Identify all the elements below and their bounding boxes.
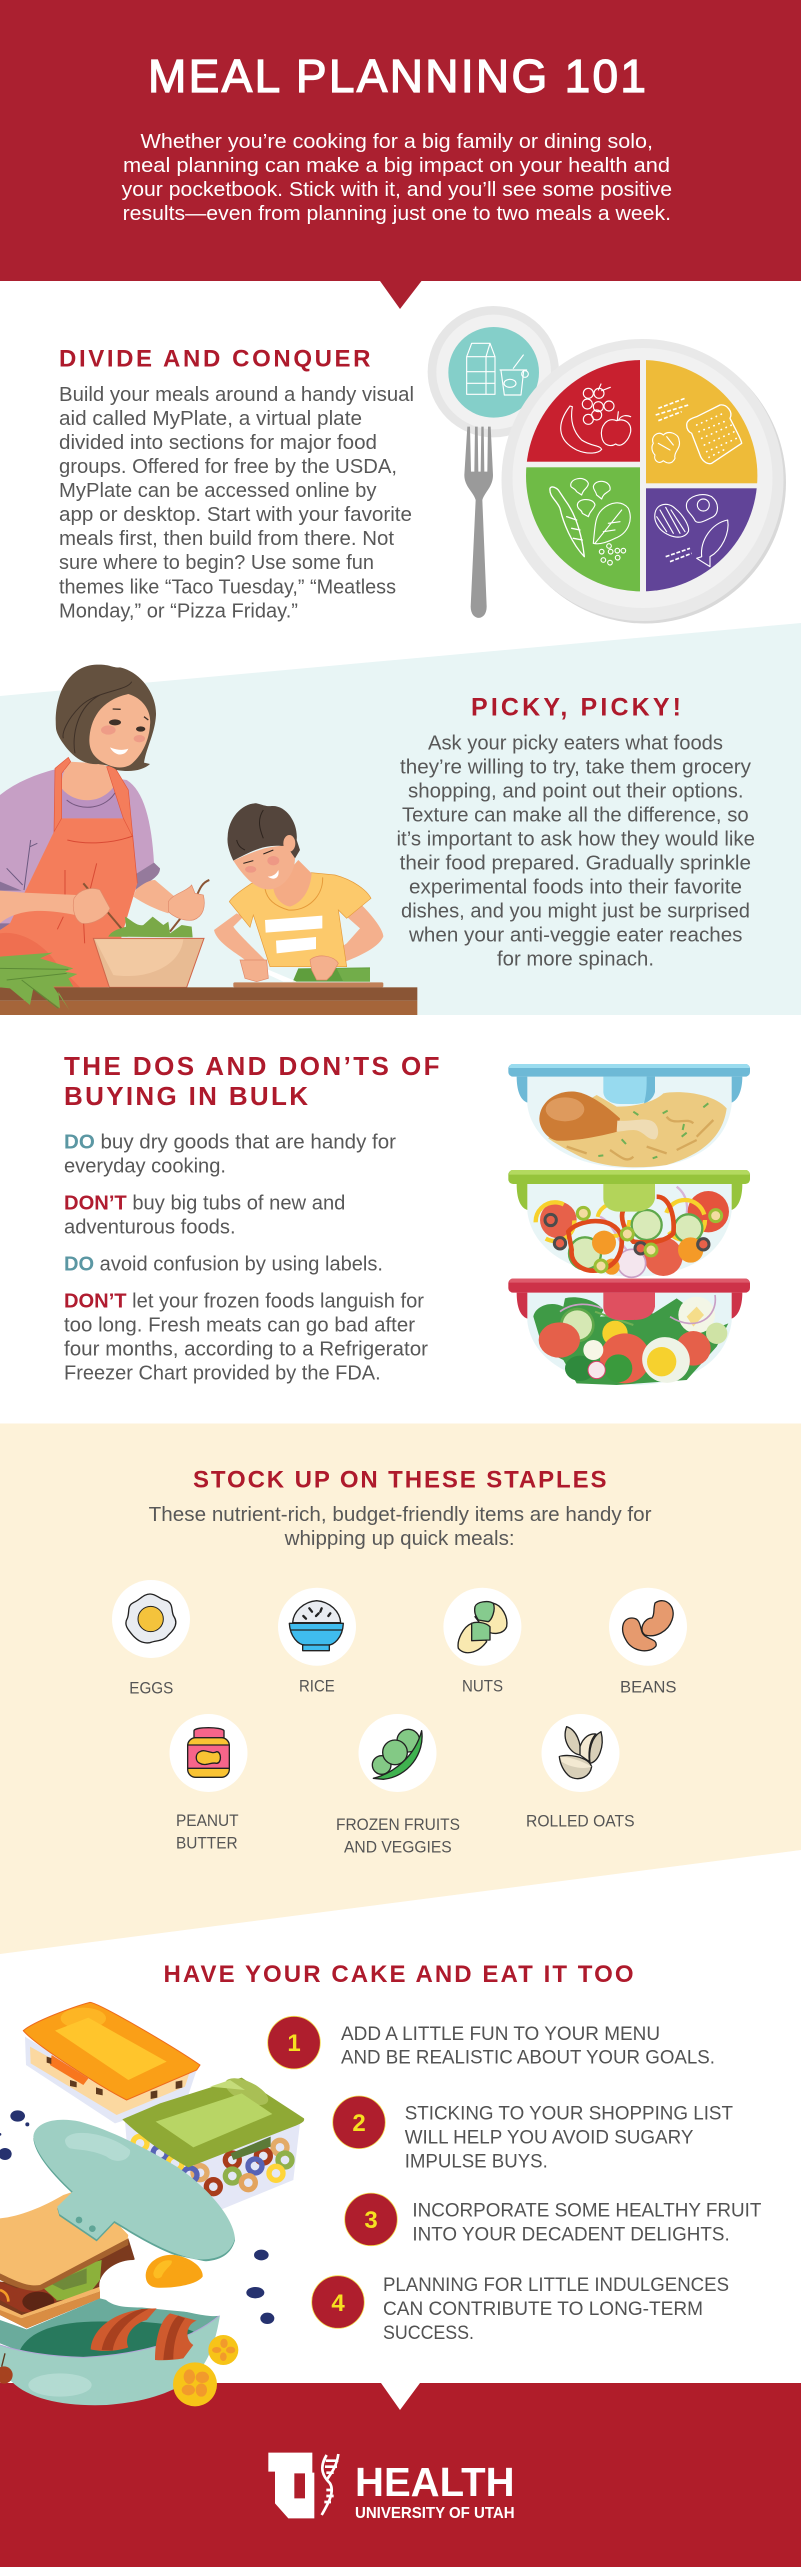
- staple labels: NUTS: [462, 1676, 503, 1695]
- icon: rice: [278, 1588, 356, 1666]
- main plate: [502, 339, 786, 624]
- body text: divide and conquer: Build your meals around a handy visual: [59, 383, 414, 406]
- icon: rolled oats: [542, 1714, 620, 1792]
- staple labels: BUTTER: [176, 1834, 238, 1853]
- dos and don'ts list: DON’T let your frozen foods languish for: [64, 1289, 424, 1312]
- body text: picky picky: Ask your picky eaters what foods: [428, 731, 723, 754]
- staple labels: AND VEGGIES: [344, 1837, 452, 1856]
- body text: divide and conquer: meals first, then build from there. Not: [59, 527, 394, 550]
- illustration: stacked food containers: [508, 1064, 750, 1390]
- tip 4: CAN CONTRIBUTE TO LONG-TERM: [383, 2299, 703, 2320]
- green beans: [0, 953, 77, 1010]
- number badge 3: 3: [364, 2207, 378, 2234]
- dos and don'ts list: DO buy dry goods that are handy for: [64, 1130, 396, 1153]
- number badge 4: [312, 2276, 364, 2328]
- intro text: [122, 130, 672, 225]
- small dairy plate: [428, 306, 559, 437]
- green container lid: [508, 1170, 750, 1212]
- fork: [464, 427, 493, 618]
- body text: picky picky: they’re willing to try, take them grocery: [400, 755, 752, 778]
- staple labels: FROZEN FRUITS: [336, 1815, 460, 1834]
- staple labels: [129, 1676, 677, 1856]
- dos and don'ts list: four months, according to a Refrigerator: [64, 1337, 428, 1360]
- tip 3: [412, 2201, 762, 2246]
- dos and don'ts list: DO avoid confusion by using labels.: [64, 1252, 383, 1275]
- body text: picky picky: when your anti-veggie eater reaches: [408, 923, 742, 946]
- blueberries: [0, 2110, 274, 2324]
- body text: divide and conquer: groups. Offered for free by the USDA,: [59, 455, 397, 478]
- logo wordmark: HEALTH: [355, 2459, 515, 2505]
- icon: peas: [358, 1714, 436, 1792]
- mint bowl: [0, 2298, 220, 2405]
- body text: divide and conquer: aid called MyPlate, a virtual plate: [59, 407, 362, 430]
- heading: staples: STOCK UP ON THESE STAPLES: [193, 1467, 606, 1494]
- panel: divide and conquer: [59, 306, 786, 624]
- tip 1: [341, 2024, 715, 2069]
- heading: dos and don'ts: THE DOS AND DON’TS OF: [64, 1051, 440, 1081]
- mother: [0, 665, 209, 987]
- panel: picky, picky: [0, 623, 801, 1015]
- staple labels: EGGS: [129, 1678, 173, 1697]
- body text: divide and conquer: sure where to begin? Use some fun: [59, 551, 374, 574]
- section: fruit: [520, 355, 640, 462]
- salad bowl: [93, 917, 204, 987]
- panel: staples: [0, 1424, 801, 1954]
- illustration: MyPlate: [428, 306, 786, 624]
- dos and don'ts list: adventurous foods.: [64, 1215, 236, 1238]
- tip 4: PLANNING FOR LITTLE INDULGENCES: [383, 2275, 729, 2296]
- dos and don'ts list: everyday cooking.: [64, 1154, 226, 1177]
- dos and don'ts list: DON’T buy big tubs of new and: [64, 1191, 345, 1214]
- staples intro: whipping up quick meals:: [284, 1527, 515, 1550]
- orange container: [23, 2002, 200, 2123]
- heading: divide and conquer: DIVIDE AND CONQUER: [59, 346, 370, 372]
- intro text: Whether you’re cooking for a big family or dining solo,: [140, 130, 653, 153]
- staple labels: RICE: [299, 1676, 335, 1695]
- illustration: food containers and sandwich: [0, 2002, 304, 2406]
- body text: picky picky: dishes, and you might just be surprised: [401, 899, 750, 922]
- body text: picky picky: it’s important to ask how they would like: [396, 827, 755, 850]
- body text: picky picky: Texture can make all the difference, so: [402, 803, 749, 826]
- intro text: results—even from planning just one to two meals a week.: [123, 202, 671, 225]
- number badge 4: 4: [331, 2290, 345, 2317]
- body text: divide and conquer: [59, 383, 414, 622]
- number badge 1: [268, 2016, 320, 2069]
- section: protein: [646, 488, 757, 592]
- tip 4: [383, 2275, 729, 2344]
- heading: dos and don'ts: [64, 1051, 440, 1111]
- body text: picky picky: shopping, and point out their options.: [408, 779, 744, 802]
- body text: picky picky: their food prepared. Gradually sprinkle: [400, 851, 751, 874]
- number badge 1: 1: [287, 2030, 301, 2057]
- cherry: [0, 2353, 13, 2384]
- heading: have your cake: HAVE YOUR CAKE AND EAT IT TOO: [164, 1961, 634, 1988]
- mint lid: [33, 2120, 235, 2261]
- logo mark: block U: [268, 2453, 338, 2518]
- illustration: mother and child cooking: [0, 665, 417, 1015]
- intro text: your pocketbook. Stick with it, and you’ll see some positive: [122, 178, 672, 201]
- tip 1: ADD A LITTLE FUN TO YOUR MENU: [341, 2024, 660, 2045]
- red container salad: [527, 1293, 732, 1390]
- heading: dos and don'ts: BUYING IN BULK: [64, 1081, 308, 1111]
- child: [214, 803, 383, 967]
- tip 2: IMPULSE BUYS.: [405, 2151, 548, 2172]
- icon: peanut butter: [170, 1714, 248, 1792]
- body text: picky picky: experimental foods into their favorite: [409, 875, 742, 898]
- body text: divide and conquer: MyPlate can be accessed online by: [59, 479, 377, 502]
- icon: beans: [609, 1588, 687, 1666]
- staples intro: [149, 1503, 652, 1550]
- title: MEAL PLANNING 101: [148, 50, 646, 102]
- fried egg: [99, 2253, 235, 2316]
- number badge 3: [345, 2193, 397, 2246]
- section: vegetables: [520, 467, 640, 597]
- cutting board and vegetable: [233, 956, 383, 987]
- green container salad: [527, 1184, 732, 1277]
- staple labels: ROLLED OATS: [526, 1811, 635, 1830]
- sandwich: [0, 2192, 135, 2328]
- bacon: [91, 2308, 197, 2360]
- red container lid: [508, 1279, 750, 1320]
- body text: divide and conquer: Monday,” or “Pizza Friday.”: [59, 600, 298, 622]
- panel: have your cake: [0, 1961, 762, 2406]
- body text: divide and conquer: app or desktop. Start with your favorite: [59, 503, 412, 526]
- footer band: [0, 2383, 801, 2567]
- body text: picky picky: [396, 731, 755, 970]
- dos and don'ts list: too long. Fresh meats can go bad after: [64, 1313, 415, 1336]
- blue container lid: [508, 1064, 750, 1104]
- body text: divide and conquer: themes like “Taco Tuesday,” “Meatless: [59, 576, 396, 598]
- tip 3: INCORPORATE SOME HEALTHY FRUIT: [412, 2201, 762, 2222]
- dos and don'ts list: [64, 1130, 428, 1384]
- tip 4: SUCCESS.: [383, 2323, 474, 2344]
- dos and don'ts list: Freezer Chart provided by the FDA.: [64, 1361, 381, 1384]
- staples intro: These nutrient-rich, budget-friendly items are handy for: [149, 1503, 652, 1526]
- icon: eggs: [112, 1580, 190, 1658]
- intro text: meal planning can make a big impact on your health and: [123, 154, 670, 177]
- panel: dos and don'ts: [64, 1051, 750, 1390]
- plate food line icons: [550, 384, 742, 567]
- logo: University of Utah Health: [268, 2453, 515, 2522]
- header band: [0, 0, 801, 309]
- number badge 2: [333, 2096, 385, 2149]
- blue container chicken and rice: [527, 1077, 732, 1168]
- icon: nuts: [443, 1588, 521, 1666]
- body text: picky picky: for more spinach.: [497, 947, 654, 970]
- number badge 2: 2: [352, 2110, 366, 2137]
- staple labels: BEANS: [620, 1677, 676, 1696]
- tip 1: AND BE REALISTIC ABOUT YOUR GOALS.: [341, 2048, 715, 2069]
- heading: picky picky: PICKY, PICKY!: [471, 694, 681, 722]
- tip 2: STICKING TO YOUR SHOPPING LIST: [405, 2103, 733, 2124]
- tip 3: INTO YOUR DECADENT DELIGHTS.: [412, 2225, 730, 2246]
- counter: [0, 987, 417, 1015]
- body text: divide and conquer: divided into sections for major food: [59, 431, 377, 454]
- staple labels: PEANUT: [176, 1811, 239, 1830]
- section: grains: [646, 360, 758, 484]
- green cereal container: [122, 2073, 304, 2210]
- logo wordmark: UNIVERSITY OF UTAH: [355, 2505, 515, 2522]
- tip 2: WILL HELP YOU AVOID SUGARY: [405, 2127, 694, 2148]
- citrus slices: [173, 2335, 238, 2406]
- tip 2: [405, 2103, 733, 2172]
